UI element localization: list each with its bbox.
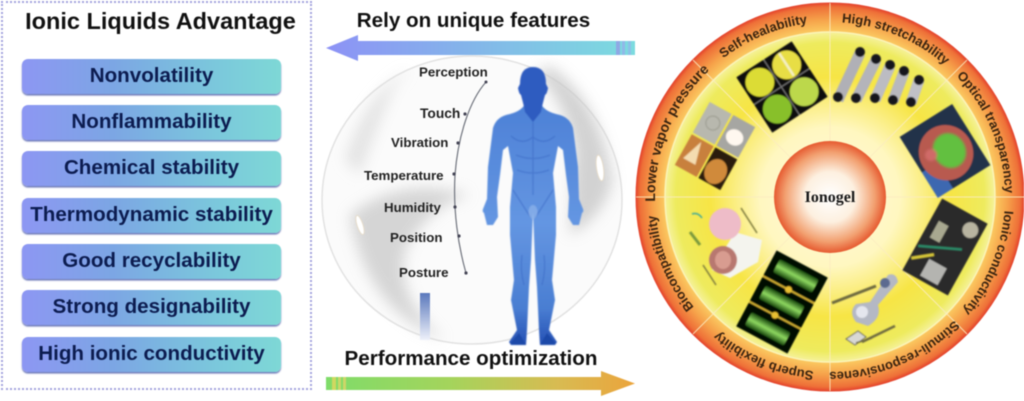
hub: Ionogel	[774, 141, 886, 253]
item: Nonflammability: Nonflammability	[71, 110, 232, 133]
item: Nonvolatility	[22, 59, 281, 94]
photo: high stretchability	[833, 47, 924, 107]
label: Touch: Touch	[420, 106, 460, 121]
photo: optical transparency	[900, 104, 990, 198]
label: Lower vapor pressure: Lower vapor pressure	[644, 66, 709, 202]
small gradient bar	[420, 293, 430, 340]
photo: lower vapor pressure	[675, 102, 755, 190]
label: Biocompatibility: Biocompatibility	[648, 216, 694, 313]
label: Posture: Posture	[399, 265, 449, 280]
arrow: performance optimization	[326, 371, 635, 396]
panel: ionic liquids advantage	[0, 0, 312, 390]
item: Thermodynamic stability	[22, 198, 281, 233]
photo: stimuli-responsiveness	[832, 274, 898, 345]
arrow: rely on unique features	[326, 35, 635, 61]
label: Perception: Perception	[419, 64, 488, 80]
label: Humidity: Humidity	[384, 200, 441, 215]
label: Ionic conductivity: Ionic conductivity	[963, 210, 1014, 316]
item: Chemical stability	[22, 151, 281, 186]
heading: Rely on unique features: Rely on unique features	[357, 9, 590, 32]
label: Superb flexibility: Superb flexibility	[714, 332, 814, 380]
heading: Ionic Liquids Advantage: Ionic Liquids Advantage	[25, 8, 296, 34]
item: Chemical stability: Chemical stability	[64, 156, 239, 179]
item: Nonvolatility: Nonvolatility	[90, 64, 213, 87]
item: Good recyclability: Good recyclability	[62, 249, 241, 272]
photo: superb flexibility	[736, 250, 828, 354]
label: Optical transparency: Optical transparency	[958, 71, 1013, 194]
icon: human body figure	[483, 67, 583, 345]
item: High ionic conductivity: High ionic conductivity	[38, 342, 265, 365]
item: Strong designability	[22, 290, 281, 325]
item: Nonflammability	[22, 105, 281, 140]
label: High stretchability: High stretchability	[842, 12, 950, 65]
photo: self-healability	[736, 41, 828, 133]
label: Stimuli-responsivenes: Stimuli-responsivenes	[829, 320, 960, 380]
item: High ionic conductivity	[22, 337, 281, 372]
label: Temperature: Temperature	[364, 168, 444, 183]
panel border	[1, 1, 312, 390]
photo: biocompatibility	[690, 208, 762, 285]
wheel: ionogel properties	[634, 2, 1024, 392]
label: Position: Position	[390, 230, 442, 245]
item: Thermodynamic stability: Thermodynamic stability	[30, 203, 273, 226]
ring labels	[644, 12, 1014, 380]
item: Good recyclability	[22, 244, 281, 279]
muscle shading	[511, 122, 555, 285]
sensing curve with perception labels	[364, 64, 488, 280]
label: Self-healability: Self-healability	[718, 16, 807, 58]
heading: Performance optimization: Performance optimization	[345, 347, 597, 370]
label: Vibration: Vibration	[391, 135, 448, 150]
photo: ionic conductivity	[902, 199, 988, 295]
head	[518, 67, 548, 122]
bubble with swirl shading	[322, 56, 622, 344]
item: Strong designability: Strong designability	[53, 295, 250, 318]
hub: Ionogel: Ionogel	[805, 189, 856, 206]
